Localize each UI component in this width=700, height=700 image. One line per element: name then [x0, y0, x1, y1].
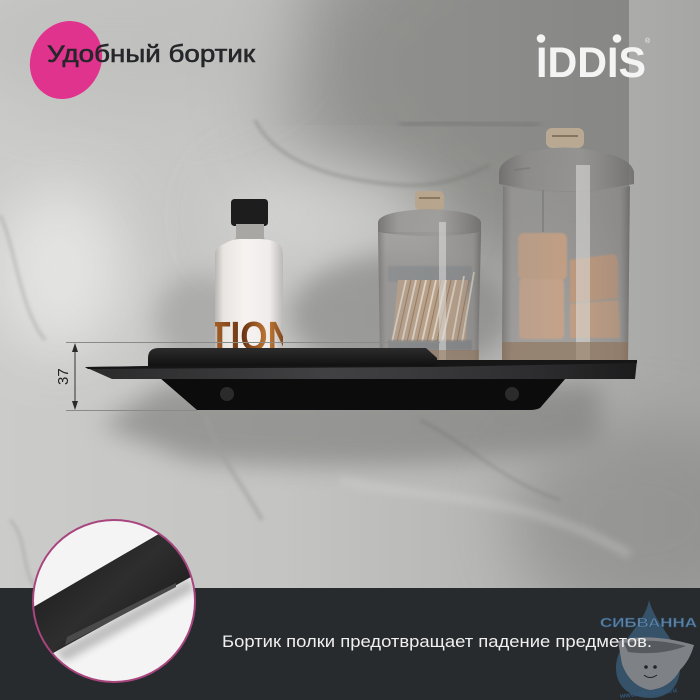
mounting screws [220, 387, 234, 401]
watermark: sibvanna [600, 600, 698, 700]
logo: IDDIS: IDDIS [536, 39, 646, 87]
wall shadow behind objects [150, 270, 215, 348]
heading: pink blob with title: Удобный бортик [47, 41, 255, 68]
caption text: Бортик полки предотвращает падение предметов. [222, 633, 652, 651]
watermark: sibvanna: СИБВАННА [600, 615, 698, 630]
raised rim [148, 348, 437, 366]
large glass jar with soap cubes [499, 128, 634, 360]
bottom caption bar [0, 588, 700, 700]
heading: pink blob with title [16, 8, 255, 112]
detail circle: shelf rim close-up [30, 510, 200, 685]
shelf with raised rim and bracket [85, 348, 637, 410]
cotton swabs [388, 266, 474, 350]
logo: IDDIS: ® [645, 37, 651, 45]
small glass jar with cotton swabs [378, 191, 481, 362]
watermark: sibvanna: www.sibvanna.ru [619, 687, 677, 700]
soap cubes [518, 233, 620, 339]
bottle label text: TION [209, 313, 293, 359]
shelf bracket [160, 378, 566, 410]
dimension: 37 [55, 342, 440, 410]
dimension: 37: 37 [55, 368, 72, 385]
bottle with lotion label [215, 199, 283, 348]
shelf plate [85, 360, 637, 379]
